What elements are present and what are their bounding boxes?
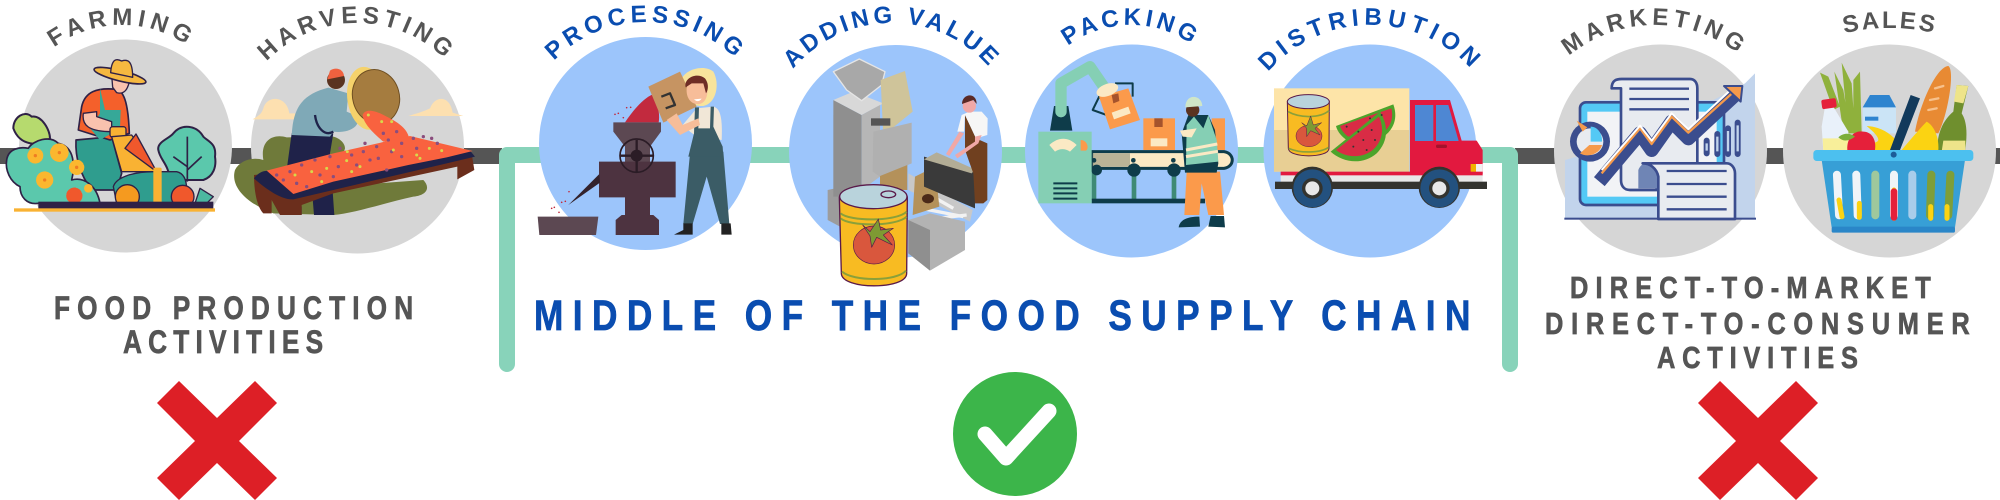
circle: packing <box>1025 44 1238 258</box>
basket rim <box>343 64 390 132</box>
left caption: food production activities <box>54 292 413 361</box>
label: farming: FARMING <box>46 8 191 46</box>
right caption: direct-to-market direct-to-consumer activities: DIRECT-TO-MARKET <box>1570 271 1931 306</box>
wheelbarrow handle <box>112 135 157 172</box>
farmer face <box>112 75 130 93</box>
icon: red cross left <box>157 381 277 500</box>
basket rim <box>1813 150 1973 161</box>
right caption: direct-to-market direct-to-consumer activities <box>1545 271 1970 376</box>
floor rail <box>1092 199 1205 203</box>
yellow ground line <box>14 208 215 212</box>
shirt <box>292 88 358 137</box>
table dark edge <box>254 151 475 199</box>
sack <box>648 72 697 123</box>
clouds <box>253 99 463 119</box>
basket foot <box>1832 227 1955 233</box>
hair <box>685 76 708 93</box>
gripper frame <box>1093 83 1133 115</box>
conveyor stripes <box>922 195 967 220</box>
conveyor <box>908 173 973 222</box>
base line <box>1564 218 1756 220</box>
gripper <box>1095 80 1120 100</box>
label: adding value: ADDING VALUE <box>786 6 1000 68</box>
stacked box label <box>1151 138 1167 146</box>
basket <box>346 64 406 129</box>
rim rivet <box>1891 152 1897 158</box>
red particles <box>552 107 631 212</box>
slot lower colours <box>1839 190 1947 218</box>
illustration: farmer with plants <box>6 60 215 212</box>
flowers <box>29 145 82 187</box>
illustration: grocery basket <box>1813 63 1973 233</box>
small document <box>1643 163 1735 219</box>
machine left face <box>833 100 862 197</box>
circle: farming <box>19 40 232 252</box>
tree veins <box>173 137 202 182</box>
asparagus <box>1820 63 1862 133</box>
paper roll <box>881 71 913 137</box>
bag label <box>922 194 934 203</box>
table bed of grains <box>267 136 473 194</box>
worker boots <box>1179 216 1225 227</box>
watermelon front slice <box>1331 112 1386 161</box>
circle: sales <box>1783 44 1996 258</box>
trend arrow orange <box>1602 91 1735 173</box>
brown column <box>880 165 907 190</box>
basket slots <box>1833 170 1955 220</box>
yellow post <box>153 168 162 205</box>
gauge <box>1049 139 1077 152</box>
illustration: delivery truck with can and watermelon <box>1274 88 1487 208</box>
overalls bib <box>90 88 121 140</box>
illustration: harvester and drying table <box>234 64 475 215</box>
soil band <box>38 202 213 209</box>
report lines <box>1629 89 1689 109</box>
robot arm base <box>1050 106 1072 131</box>
illustration: canning machine and operator <box>828 59 988 286</box>
sack mark <box>661 93 675 108</box>
hat brim <box>93 64 147 87</box>
worker head <box>1186 103 1199 117</box>
milk carton <box>1863 95 1896 133</box>
banana right <box>1902 122 1938 150</box>
feed unit <box>873 123 912 177</box>
conveyor shadow <box>1093 153 1130 167</box>
headlight <box>1471 164 1476 173</box>
flower centres <box>35 153 77 180</box>
operator shirt <box>957 112 988 138</box>
hand wheel hub <box>621 140 653 172</box>
tomato can <box>839 185 907 286</box>
olive bush <box>234 136 427 215</box>
conveyor legs <box>1094 168 1174 200</box>
circle: marketing <box>1554 44 1767 258</box>
control box <box>1038 132 1092 203</box>
machine base <box>616 215 659 235</box>
machine top <box>833 92 883 115</box>
red flower <box>68 189 81 202</box>
trend arrow dark <box>1599 95 1735 182</box>
red stream <box>625 94 659 122</box>
bread <box>1915 66 1951 133</box>
label: marketing: MARKETING <box>1560 8 1744 55</box>
wheel arches <box>1292 167 1333 208</box>
worker torso <box>1182 115 1218 173</box>
report document <box>1612 79 1697 190</box>
carried box label <box>1112 107 1131 119</box>
label: sales: SALES <box>1843 12 1934 32</box>
robot arm <box>1061 67 1106 112</box>
circle: processing <box>539 37 752 250</box>
feed dark slot <box>871 118 890 126</box>
milk bottle <box>1822 107 1848 152</box>
operator apron and legs <box>965 115 987 203</box>
cabinet top <box>924 152 975 173</box>
boots <box>674 223 732 235</box>
grains purple <box>277 132 437 187</box>
left caption: food production activities: FOOD PRODUCTION <box>54 292 413 327</box>
hat crown <box>111 60 133 77</box>
tablet screen <box>1587 112 1717 197</box>
left caption: food production activities: ACTIVITIES <box>123 326 323 361</box>
red stripe <box>1281 172 1483 176</box>
farmer arm <box>83 112 112 132</box>
basket body <box>1822 160 1965 227</box>
icon: green check <box>953 372 1077 496</box>
circle: distribution <box>1264 44 1476 258</box>
vest stripes <box>1186 144 1218 157</box>
helmet <box>1185 97 1202 107</box>
table wood <box>254 153 474 215</box>
icon: red cross right <box>1698 381 1818 500</box>
teal bush left <box>6 139 100 204</box>
falling grains <box>363 111 409 142</box>
apple <box>1847 131 1875 150</box>
stacked box <box>1143 118 1175 150</box>
bread slashes <box>1928 86 1943 110</box>
knob <box>1081 140 1088 151</box>
watermelon back slice <box>1336 104 1395 140</box>
right caption: direct-to-market direct-to-consumer activities: ACTIVITIES <box>1657 341 1858 376</box>
yellow bud <box>84 184 93 193</box>
worker legs <box>683 152 729 224</box>
cab side window <box>1415 105 1433 141</box>
gray timeline left <box>0 148 502 164</box>
trousers <box>280 133 334 215</box>
door handle <box>1436 145 1447 148</box>
trend arrow white <box>1602 87 1733 170</box>
grains yellow <box>295 115 442 182</box>
conveyor belt <box>1092 152 1232 168</box>
shirt fold <box>315 115 333 133</box>
label: processing: PROCESSING <box>544 6 742 60</box>
clipboard <box>1180 128 1197 137</box>
machine body <box>599 162 676 215</box>
chute <box>568 174 600 205</box>
circle: adding value <box>789 45 1002 258</box>
dark handle <box>1890 95 1920 150</box>
wheels <box>1293 169 1331 207</box>
tiller body <box>113 172 187 203</box>
leaf <box>1838 134 1855 141</box>
pie chart <box>1570 122 1610 162</box>
illustration: marketing report and chart <box>1564 73 1756 220</box>
box behind worker <box>1212 118 1225 150</box>
glove <box>110 127 126 137</box>
center heading: middle of the food supply chain: MIDDLE OF THE FOOD SUPPLY CHAIN <box>534 292 1470 340</box>
label: packing: PACKING <box>1060 8 1196 45</box>
label: harvesting: HARVESTING <box>256 6 452 60</box>
operator head <box>963 99 976 113</box>
farmer torso <box>78 89 129 140</box>
report cutout <box>1638 162 1659 188</box>
light blue backdrop <box>1565 73 1755 218</box>
face <box>687 81 707 104</box>
wine bottle foil <box>1942 85 1968 152</box>
bars <box>1707 123 1738 154</box>
wine bottle <box>1937 85 1968 152</box>
overalls bib <box>688 107 723 157</box>
hopper <box>613 122 661 163</box>
worker arm <box>667 113 700 135</box>
worker shirt <box>683 107 722 140</box>
safety vest <box>1186 115 1218 165</box>
hopper <box>833 59 885 101</box>
gray timeline right <box>1515 148 2000 164</box>
mint bracket around middle of the supply chain <box>507 155 1510 364</box>
head <box>327 71 345 89</box>
right caption: direct-to-market direct-to-consumer activities: DIRECT-TO-CONSUMER <box>1545 307 1970 342</box>
milk level <box>1823 138 1848 152</box>
belt dots <box>1092 158 1096 163</box>
cab <box>1410 100 1483 174</box>
conveyor stand <box>908 213 965 271</box>
light green bush <box>13 114 50 144</box>
white stripe <box>1281 175 1483 182</box>
bottle cap <box>1821 98 1837 109</box>
cargo box lower shade <box>1274 130 1409 172</box>
label: distribution: DISTRIBUTION <box>1257 8 1481 71</box>
orange funnel <box>125 134 157 172</box>
illustration: packing robot, conveyor and worker <box>1038 67 1232 227</box>
operator hair <box>962 95 977 104</box>
control cabinet <box>924 157 975 208</box>
stacked box tape <box>1154 118 1163 127</box>
banana left <box>1867 126 1898 151</box>
tray <box>538 217 598 235</box>
machine base <box>828 187 847 227</box>
cap <box>327 69 344 79</box>
carried box tape <box>1112 93 1119 103</box>
farmer legs <box>76 137 122 190</box>
small tomato can <box>1287 95 1329 156</box>
arrow head <box>1724 86 1742 102</box>
circle: harvesting <box>251 40 464 254</box>
hand wheel <box>620 139 653 172</box>
tablet <box>1580 102 1724 205</box>
operator arms <box>946 132 982 158</box>
cargo box <box>1274 88 1409 172</box>
worker trousers <box>1184 172 1224 215</box>
watermelon seeds <box>1347 115 1382 150</box>
cab front window <box>1436 105 1459 141</box>
tiller wheels <box>115 185 139 209</box>
small leaf right <box>195 188 213 207</box>
vents <box>1053 183 1077 199</box>
rollers <box>1091 165 1102 175</box>
right tree <box>158 127 215 180</box>
machine right face <box>862 105 880 190</box>
chassis <box>1275 182 1487 189</box>
carried box <box>1099 88 1140 129</box>
illustration: grinding machine and worker <box>538 68 732 235</box>
small document lines <box>1667 171 1727 209</box>
smile <box>694 99 702 101</box>
paper bag <box>913 167 939 215</box>
head scarf <box>680 68 717 106</box>
